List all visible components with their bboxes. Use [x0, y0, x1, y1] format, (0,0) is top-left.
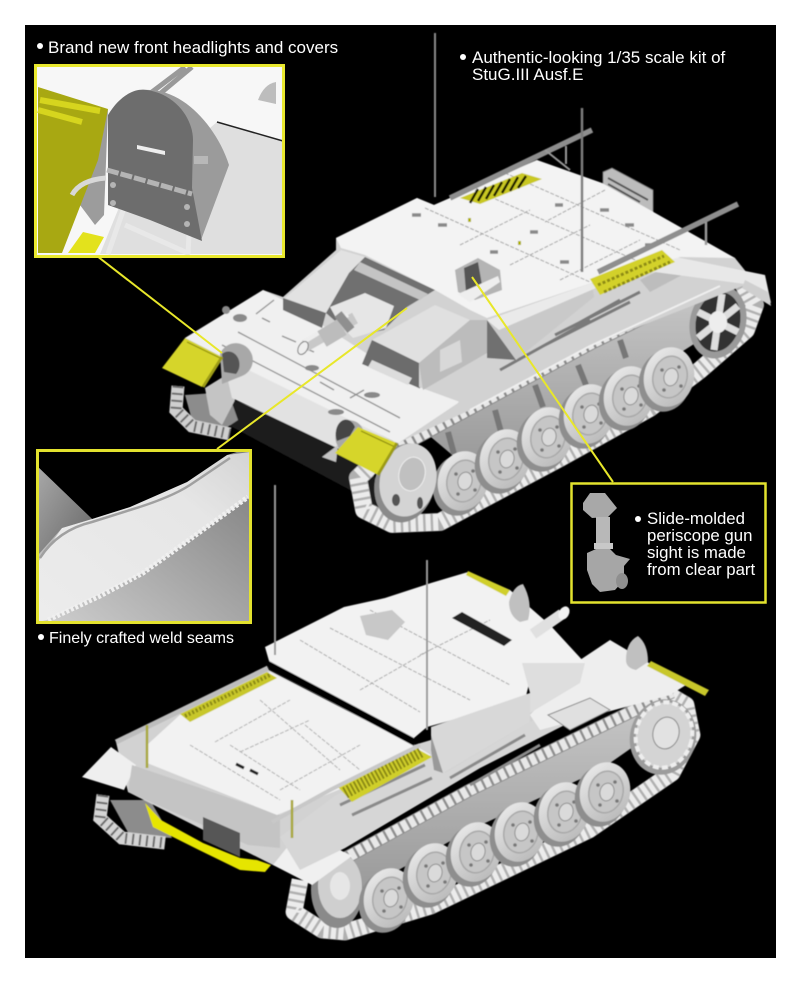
far front track — [176, 375, 238, 434]
gun barrel — [296, 314, 355, 356]
olive panel hinges — [38, 100, 100, 122]
gray backing — [80, 109, 108, 225]
track top run — [320, 692, 672, 872]
walkway details — [340, 735, 540, 815]
fender side edges — [203, 357, 397, 475]
black area — [38, 451, 240, 519]
left wing block top — [285, 250, 365, 313]
suspension arms — [448, 340, 626, 454]
right antenna — [426, 560, 428, 730]
olive bracket right — [291, 800, 293, 838]
hinge row — [107, 170, 192, 194]
periscope bullet — [635, 516, 641, 522]
rail bracket far — [545, 146, 570, 170]
track top run — [392, 272, 735, 450]
exhaust marks — [236, 764, 258, 774]
caption: scale kit: Authentic-looking 1/35 scale kit of — [472, 48, 726, 67]
engine deck — [147, 672, 431, 815]
engine deck panel lines — [190, 700, 360, 800]
hull base silhouette — [185, 160, 771, 442]
rail bracket near — [705, 222, 707, 245]
black deck gap — [269, 661, 414, 746]
headlight near — [626, 636, 648, 670]
main track — [294, 692, 692, 932]
rear walkway and stowage — [400, 257, 745, 442]
front sprocket — [622, 692, 704, 782]
hull side — [425, 286, 716, 470]
casemate front slope — [522, 663, 585, 713]
upper band — [38, 452, 250, 622]
hull side — [330, 695, 660, 900]
headlight cover side — [145, 90, 229, 240]
deck detail lines — [222, 300, 420, 432]
rear fender right — [273, 835, 352, 885]
yellow front right fender — [335, 427, 397, 475]
hatch recess — [360, 610, 405, 640]
frame — [572, 484, 766, 602]
tank render: rear view — [82, 485, 709, 938]
yellow strip top — [466, 571, 510, 596]
top right fitting — [258, 82, 276, 104]
slit — [137, 145, 165, 155]
lower struts — [108, 205, 190, 254]
rear rail right — [272, 745, 420, 822]
drive sprocket rear — [682, 279, 754, 365]
gun barrel — [533, 604, 572, 634]
caption: scale kit — [460, 48, 726, 84]
weld bead — [48, 497, 248, 620]
recess shelf — [354, 262, 428, 300]
underside shadow — [208, 398, 400, 520]
fender folded edges — [187, 342, 395, 447]
sponson — [487, 283, 596, 360]
rear rail far — [450, 130, 592, 198]
far antenna — [434, 33, 436, 197]
periscope text line 3: sight is made — [647, 543, 746, 562]
yellow grille near — [590, 250, 675, 295]
rear idler — [311, 852, 363, 928]
walkway — [280, 695, 590, 870]
road wheels — [426, 342, 701, 521]
casemate and engine deck top — [336, 160, 735, 318]
rear tracks — [100, 795, 172, 843]
yellow grille far — [460, 173, 542, 204]
deck fittings — [222, 306, 380, 415]
top struts — [148, 67, 192, 97]
commander hatch area — [455, 258, 502, 302]
roof slot — [452, 612, 512, 646]
plate edge line — [217, 122, 283, 141]
olive panel — [38, 87, 108, 253]
caption: scale kit: StuG.III Ausf.E — [472, 65, 584, 84]
rear fender left — [82, 747, 136, 790]
yellow strip right — [647, 661, 709, 696]
rear rail near — [598, 204, 738, 272]
headlight cover front — [108, 90, 202, 241]
panel lines on roof — [425, 173, 680, 282]
periscope text line 2: periscope gun — [647, 526, 752, 545]
side latch — [194, 156, 208, 164]
front right headlight — [322, 420, 364, 462]
casemate roof — [265, 572, 585, 738]
sponson — [431, 693, 530, 773]
hull base silhouette — [116, 663, 686, 870]
ridge highlight — [40, 458, 230, 558]
callout connector lines — [97, 256, 613, 482]
headlight far — [509, 584, 530, 622]
right wing block — [362, 305, 487, 390]
road wheels — [352, 757, 637, 938]
periscope part — [583, 493, 630, 592]
near antenna — [581, 108, 583, 272]
olive bracket left — [146, 725, 148, 768]
rear deck plate — [592, 257, 771, 303]
periscope text line 4: from clear part — [647, 560, 756, 579]
bright yellow fender — [68, 232, 104, 253]
dark rear hatch — [203, 817, 240, 857]
left antenna — [274, 485, 276, 655]
front idler wheel — [366, 437, 444, 529]
yellow tow bar — [145, 803, 271, 872]
frame — [38, 450, 250, 622]
frame — [36, 66, 284, 256]
front deck — [530, 640, 686, 730]
strut — [38, 467, 92, 555]
periscope text: Slide-molded — [647, 509, 745, 528]
roof fittings — [412, 205, 653, 262]
stowage box — [548, 698, 610, 730]
bolts — [110, 182, 190, 227]
near track — [358, 282, 755, 524]
inset: weld seams — [37, 450, 251, 622]
left wing block front — [283, 298, 326, 328]
gun mantlet — [330, 293, 394, 338]
yellow marks on roof — [468, 220, 521, 243]
yellow front left fender — [162, 338, 222, 387]
rear rail left — [116, 668, 268, 742]
front left headlight — [220, 343, 253, 384]
glacis plate — [222, 355, 397, 458]
inset: front headlights — [36, 65, 284, 256]
stowage box — [603, 168, 653, 214]
lower steel — [37, 450, 251, 622]
tank render: top view — [162, 33, 771, 529]
inset: periscope — [572, 484, 766, 602]
driver compartment recess — [326, 257, 435, 336]
inset background — [36, 65, 284, 256]
caption: weld seams: Finely crafted weld seams — [49, 630, 234, 647]
front deck — [185, 290, 460, 443]
yellow grille left — [180, 672, 277, 722]
grab handle — [72, 178, 106, 195]
rear hull plate — [128, 765, 280, 848]
fender tip — [742, 280, 771, 306]
caption: headlights: Brand new front headlights and covers — [48, 38, 338, 57]
lower plate — [100, 122, 284, 254]
yellow grille right — [338, 747, 432, 802]
roof panel lines — [300, 610, 510, 712]
